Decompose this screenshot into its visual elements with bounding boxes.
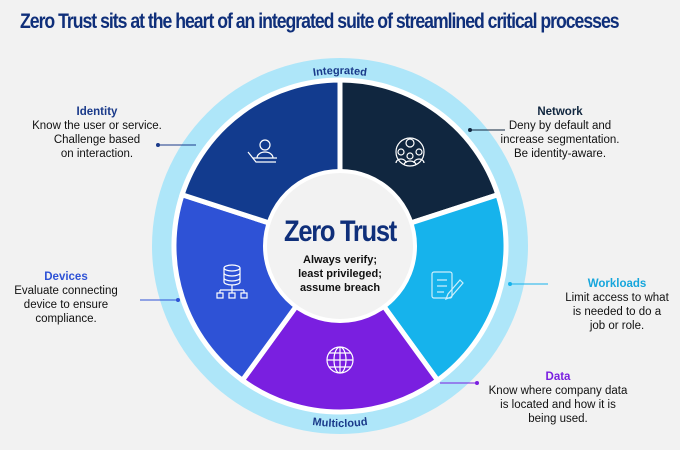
icon: devices database	[217, 265, 247, 298]
text: network: Network	[537, 106, 583, 118]
text: data	[489, 371, 628, 425]
text: data: is located and how it is	[500, 399, 616, 411]
text: devices: device to ensure	[24, 299, 108, 311]
text: devices: compliance.	[35, 313, 97, 325]
segments	[174, 80, 506, 412]
ring label: Multicloud: Multicloud	[312, 417, 368, 428]
text: devices: Evaluate connecting	[14, 285, 118, 297]
text: workloads	[565, 278, 669, 332]
center text	[284, 214, 397, 294]
text: workloads: is needed to do a	[573, 306, 661, 318]
text: data: Data	[546, 371, 570, 383]
text: network	[501, 106, 619, 160]
center circle	[265, 171, 415, 321]
text: network: Be identity-aware.	[514, 148, 606, 160]
icon: network people	[396, 138, 424, 166]
center text: least privileged;	[298, 268, 382, 280]
center text: Always verify;	[303, 254, 377, 266]
center text: assume breach	[300, 282, 380, 294]
icon: identity user	[248, 140, 277, 162]
title: Zero Trust sits at the heart of an integrated suite of streamlined critical processes	[20, 10, 619, 33]
text: identity	[32, 106, 162, 160]
text: network: increase segmentation.	[501, 134, 619, 146]
icon: data globe	[327, 347, 353, 373]
text: identity: Identity	[77, 106, 117, 118]
icon: workloads checklist	[432, 272, 463, 299]
text: devices: Devices	[44, 271, 88, 283]
connector lines	[140, 128, 548, 385]
text: workloads: job or role.	[590, 320, 644, 332]
text: data: being used.	[528, 413, 588, 425]
ring label: Integrated: Integrated	[313, 67, 367, 76]
text: identity: Know the user or service.	[32, 120, 162, 132]
center text: Zero Trust	[284, 214, 397, 247]
text: identity: on interaction.	[61, 148, 133, 160]
text: network: Deny by default and	[509, 120, 611, 132]
text: workloads: Workloads	[588, 278, 646, 290]
outer ring	[152, 58, 528, 434]
text: workloads: Limit access to what	[565, 292, 669, 304]
text: identity: Challenge based	[54, 134, 140, 146]
text: devices	[14, 271, 118, 325]
text: data: Know where company data	[489, 385, 627, 397]
